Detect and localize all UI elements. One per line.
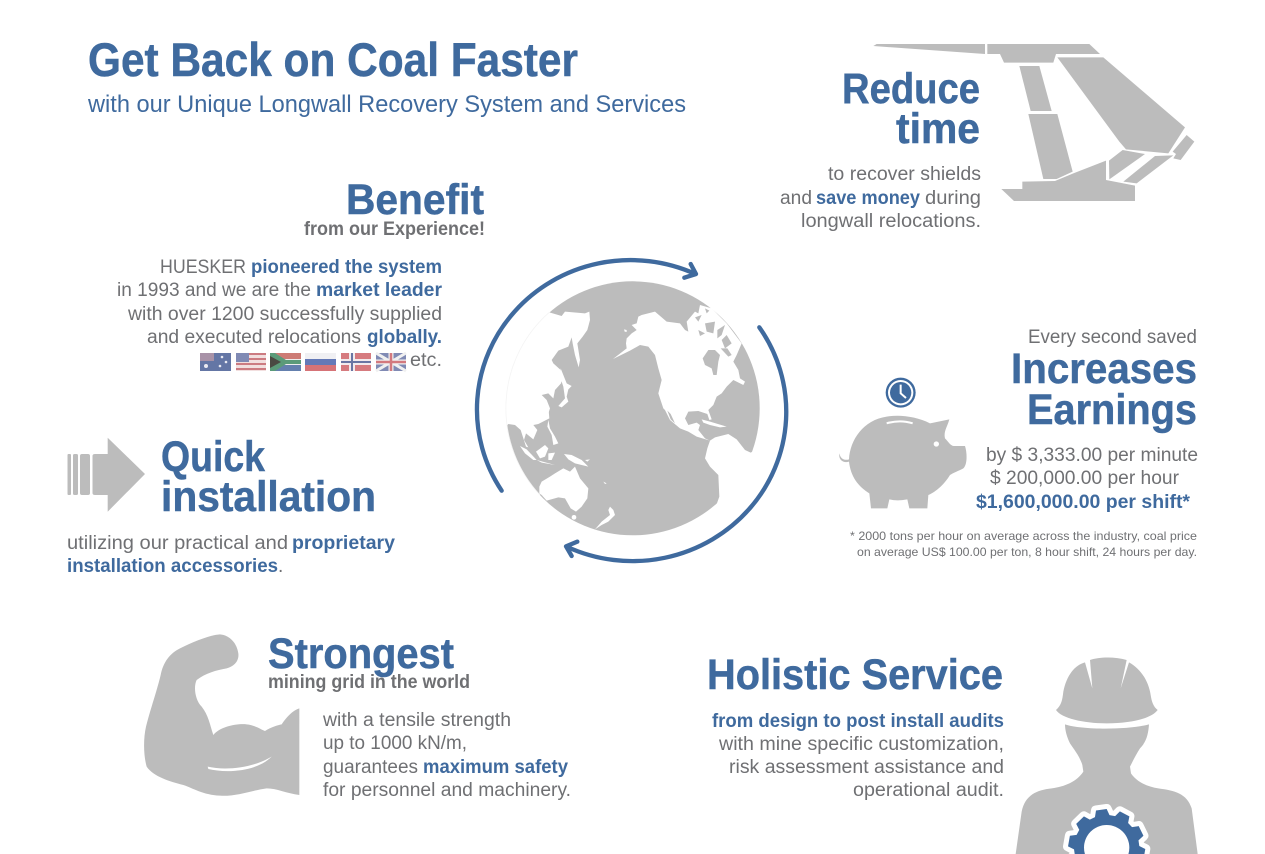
- panel: holistic service: Holistic Service: [707, 651, 1003, 699]
- panel: quick installation: Quick: [161, 433, 265, 481]
- panel: increases earnings: Every second saved: [1028, 327, 1197, 348]
- globe ocean: [506, 281, 760, 535]
- panel: increases earnings: Earnings: [1027, 386, 1197, 434]
- icon: worker with gear: [1016, 657, 1198, 854]
- panel: increases earnings: $ 200,000.00 per hour: [990, 468, 1180, 489]
- footnote: [850, 529, 1197, 559]
- Java: [537, 460, 555, 465]
- helmet: [1056, 657, 1158, 723]
- arrow: lower-right arc: [566, 327, 786, 561]
- body: [1016, 724, 1198, 854]
- Cuba and Hispaniola: [702, 419, 727, 427]
- panel: quick installation: [67, 433, 395, 577]
- panel: quick installation: installation: [161, 473, 376, 521]
- panel: benefit: pioneered the system: [251, 257, 442, 278]
- Australia: [539, 467, 588, 512]
- panel: reduce time: and: [780, 188, 812, 209]
- panel: benefit: market leader: [316, 280, 443, 301]
- icon: flag row: [200, 353, 406, 371]
- panel: increases earnings: $1,600,000.00 per shift*: [976, 492, 1191, 513]
- panel: strongest: Strongest: [268, 630, 454, 678]
- panel: increases earnings: Increases: [1011, 345, 1197, 393]
- Arctic archipelago straits and Hudson Bay: [695, 308, 732, 375]
- Sumatra: [520, 446, 537, 460]
- panel: benefit: etc.: [410, 350, 442, 371]
- panel: strongest: maximum safety: [423, 757, 568, 778]
- panel: quick installation: proprietary: [292, 533, 395, 554]
- panel: benefit: Benefit: [346, 176, 484, 224]
- panel: strongest: [268, 630, 571, 801]
- Aleutian islets: [624, 329, 627, 332]
- panel: reduce time: time: [896, 105, 980, 153]
- Japan: [558, 368, 572, 407]
- title: Get Back on Coal Faster: [88, 33, 578, 86]
- panel: quick installation: utilizing our practical and: [67, 533, 288, 554]
- footnote: on average US$ 100.00 per ton, 8 hour shift, 24 hours per day.: [857, 545, 1197, 559]
- panel: strongest: guarantees: [323, 757, 418, 778]
- Pacific islets: [585, 459, 590, 462]
- Tasmania: [572, 515, 576, 520]
- icon: flag of Norway: [341, 353, 371, 371]
- Gulf of California: [667, 411, 675, 423]
- panel: holistic service: operational audit.: [853, 780, 1004, 801]
- globe with circular arrows: [477, 260, 786, 561]
- arrow: upper-left arc: [477, 260, 696, 491]
- icon: flag of Russia: [305, 353, 336, 371]
- panel: holistic service: from design to post install audits: [712, 711, 1004, 732]
- icon: flexed arm: [144, 634, 299, 796]
- panel: reduce time: during: [925, 188, 981, 209]
- panel: quick installation: .: [278, 556, 283, 577]
- panel: reduce time: save money: [816, 188, 920, 209]
- panel: holistic service: risk assessment assistance and: [729, 757, 1004, 778]
- icon: flag of Australia: [200, 353, 231, 371]
- panel: increases earnings: [850, 327, 1198, 559]
- Philippines: [547, 420, 558, 445]
- panel: quick installation: installation accessories: [67, 556, 278, 577]
- panel: strongest: mining grid in the world: [268, 672, 470, 693]
- panel: benefit: in 1993 and we are the: [117, 280, 311, 301]
- panel: reduce time: [780, 65, 981, 232]
- icon: longwall shield: [873, 44, 1194, 201]
- Sulawesi: [548, 453, 555, 460]
- northern Asia: [493, 300, 590, 413]
- panel: benefit: with over 1200 successfully supplied: [127, 304, 442, 325]
- land: lower left (SE Asia, Australia): [493, 407, 615, 529]
- land: North America: [613, 305, 745, 441]
- piggy bank: [839, 416, 967, 508]
- panel: benefit: HUESKER: [160, 257, 246, 278]
- New Guinea: [564, 454, 588, 467]
- faint globe outline: [506, 312, 549, 495]
- gear: [1068, 809, 1145, 854]
- panel: benefit: from our Experience!: [304, 219, 485, 240]
- panel: strongest: with a tensile strength: [322, 710, 511, 731]
- panel: strongest: for personnel and machinery.: [323, 780, 571, 801]
- southern Asia: [493, 407, 549, 447]
- Borneo: [536, 445, 548, 458]
- title: with our Unique Longwall Recovery System and Services: [87, 91, 686, 118]
- land: upper left (Siberia, East Asia): [493, 300, 631, 413]
- panel: reduce time: to recover shields: [828, 164, 981, 185]
- footnote: * 2000 tons per hour on average across the industry, coal price: [850, 529, 1197, 543]
- panel: holistic service: with mine specific customization,: [718, 734, 1004, 755]
- panel: benefit: and executed relocations: [147, 327, 361, 348]
- panel: reduce time: Reduce: [842, 65, 980, 113]
- panel: holistic service: [707, 651, 1004, 801]
- icon: speed arrow: [68, 438, 145, 512]
- New Zealand: [595, 507, 615, 529]
- panel: increases earnings: by $ 3,333.00 per minute: [986, 445, 1198, 466]
- clock: [886, 378, 916, 408]
- North America mainland: [613, 305, 745, 441]
- panel: benefit: globally.: [367, 327, 442, 348]
- icon: piggy bank with clock: [839, 378, 967, 508]
- icon: flag of South Africa: [270, 353, 301, 371]
- icon: flag of USA: [236, 353, 266, 371]
- panel: benefit: [117, 176, 485, 371]
- panel: strongest: up to 1000 kN/m,: [323, 733, 467, 754]
- panel: reduce time: longwall relocations.: [801, 211, 981, 232]
- title: [87, 33, 686, 118]
- land: South America and Caribbean: [667, 411, 780, 550]
- icon: flag of UK: [376, 353, 406, 371]
- South America: [697, 434, 780, 550]
